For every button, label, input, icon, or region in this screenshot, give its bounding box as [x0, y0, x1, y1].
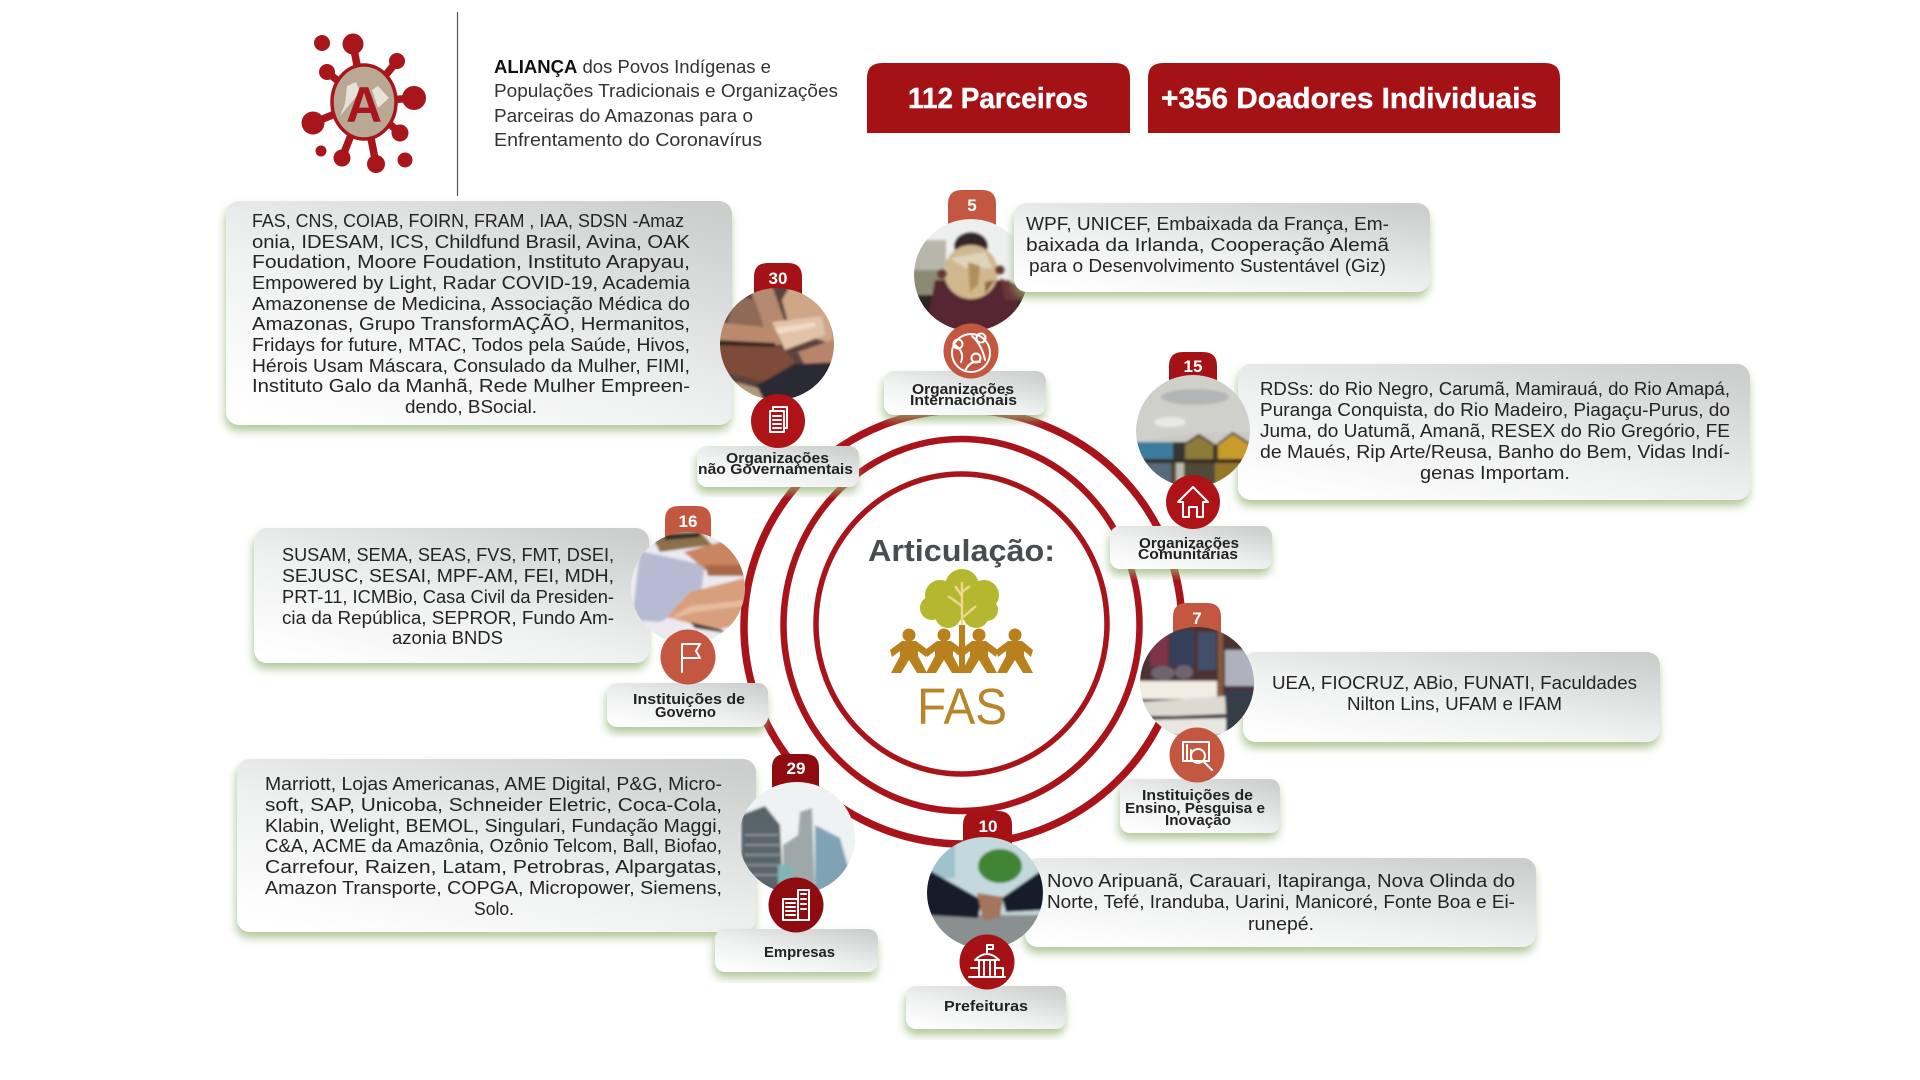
panel: empresas list: soft, SAP, Unicoba, Schneider Eletric, Coca-Cola,	[265, 794, 722, 815]
icon: globe with pins	[944, 324, 998, 378]
icon: house	[1166, 475, 1220, 529]
panel: governo list: PRT-11, ICMBio, Casa Civil da Presiden-	[282, 586, 614, 607]
panel: organizações internacionais list: WPF, UNICEF, Embaixada da França, Em-	[1026, 213, 1389, 234]
header text: alliance name: Enfrentamento do Coronavírus	[494, 129, 762, 150]
FAS logo: tree and people	[890, 569, 1033, 735]
count tab 15: 15	[1184, 357, 1202, 376]
photo: books and glasses	[1140, 627, 1254, 736]
panel: prefeituras list: Novo Aripuanã, Carauari, Itapiranga, Nova Olinda do	[1047, 870, 1515, 891]
panel: organizações internacionais list: baixada da Irlanda, Cooperação Alemã	[1026, 234, 1390, 255]
label box: Ensino, Pesquisa e	[1125, 801, 1265, 817]
badge: 112 parceiros	[867, 63, 1130, 133]
header text: alliance name	[494, 56, 838, 150]
panel: organizações não governamentais list: Foudation, Moore Foudation, Instituto Arapyau,	[252, 251, 690, 272]
panel: organizações não governamentais list: Instituto Galo da Manhã, Rede Mulher Empreen-	[252, 375, 690, 396]
label box: Instituições de	[633, 692, 745, 708]
node: organizações comunitárias	[1110, 352, 1272, 569]
logo: virus emblem	[302, 34, 426, 173]
label box: Inovação	[1165, 813, 1231, 829]
count tab 7	[1173, 603, 1221, 635]
photo: hands with paper	[631, 532, 745, 640]
label box	[1110, 526, 1272, 569]
label box: Empresas	[764, 945, 835, 961]
logo: virus emblem: A	[346, 77, 382, 133]
panel: comunitárias list: de Maués, Rip Arte/Reusa, Banho do Bem, Vidas Indí-	[1260, 441, 1730, 462]
panel: empresas list: Marriott, Lojas Americanas, AME Digital, P&G, Micro-	[265, 773, 722, 794]
label box	[607, 683, 768, 727]
count tab 7: 7	[1192, 609, 1202, 628]
panel: comunitárias list: Juma, do Uatumã, Amanã, RESEX do Rio Gregório, FE	[1260, 420, 1730, 441]
panel: organizações não governamentais list: FAS, CNS, COIAB, FOIRN, FRAM , IAA, SDSN -Amaz	[252, 210, 684, 231]
badge: 112 parceiros: 112 Parceiros	[908, 83, 1088, 115]
label box: Organizações	[726, 451, 829, 467]
panel: organizações não governamentais list: Empowered by Light, Radar COVID-19, Academia	[252, 272, 691, 293]
panel: comunitárias list: RDSs: do Rio Negro, Carumã, Mamirauá, do Rio Amapá,	[1260, 378, 1730, 399]
label box	[1120, 779, 1280, 833]
panel: comunitárias list	[1238, 364, 1750, 500]
center heading: Articulação:	[868, 533, 1055, 568]
node: organizações internacionais	[884, 190, 1046, 415]
icon: town hall	[960, 934, 1014, 990]
icon: documents	[751, 394, 805, 448]
panel: empresas list: Solo.	[474, 898, 514, 919]
label box	[715, 929, 878, 972]
panel: governo list	[254, 528, 649, 663]
count tab 16: 16	[679, 512, 697, 531]
panel: empresas list: Klabin, Welight, BEMOL, Singulari, Fundação Maggi,	[265, 815, 722, 836]
panel: comunitárias list: Puranga Conquista, do Rio Madeiro, Piagaçu-Purus, do	[1260, 399, 1730, 420]
label box	[906, 986, 1066, 1029]
panel: governo list: azonia BNDS	[392, 627, 503, 648]
label box: Internacionais	[910, 393, 1017, 409]
icon: buildings	[768, 878, 824, 932]
icon: flag	[660, 630, 716, 684]
count tab 10: 10	[979, 817, 997, 836]
panel: organizações internacionais list	[1014, 203, 1430, 292]
panel: prefeituras list	[1025, 858, 1536, 947]
count tab 16	[665, 506, 711, 540]
label box: Prefeituras	[944, 999, 1028, 1015]
count tab 29: 29	[787, 759, 805, 778]
FAS logo: tree and people: FAS	[917, 678, 1007, 735]
node: organizações não governamentais	[697, 263, 859, 487]
panel: empresas list: C&A, ACME da Amazônia, Ozônio Telcom, Ball, Biofao,	[265, 835, 722, 856]
photo: handshake	[927, 837, 1043, 946]
count tab 5	[948, 190, 996, 225]
panel: governo list: cia da República, SEPROR, Fundo Am-	[282, 607, 614, 628]
count tab 10	[963, 811, 1012, 845]
panel: organizações não governamentais list: Amazonas, Grupo TransformAÇÃO, Hermanitos,	[252, 313, 690, 334]
panel: empresas list: Amazon Transporte, COPGA, Micropower, Siemens,	[265, 877, 722, 898]
icon: magnifier over chart	[1170, 728, 1224, 782]
header vertical divider	[456, 12, 458, 196]
count tab 29	[772, 754, 819, 790]
panel: organizações não governamentais list: Fridays for future, MTAC, Todos pela Saúde, Hivos,	[252, 334, 690, 355]
node: instituições de governo	[607, 506, 768, 727]
concentric rings	[744, 410, 1182, 844]
panel: empresas list	[237, 759, 756, 932]
panel: organizações não governamentais list: onia, IDESAM, ICS, Childfund Brasil, Avina, OAK	[252, 231, 691, 252]
count tab 30: 30	[769, 269, 787, 288]
count tab 5: 5	[967, 196, 977, 215]
label box: Comunitárias	[1138, 547, 1238, 563]
photo: stacked hands	[720, 288, 834, 398]
photo: child holding globe	[914, 219, 1026, 329]
label box	[697, 446, 859, 487]
badge: doadores individuais: +356 Doadores Individuais	[1161, 83, 1537, 115]
panel: prefeituras list: runepé.	[1248, 913, 1314, 934]
panel: organizações internacionais list: para o Desenvolvimento Sustentável (Giz)	[1029, 255, 1386, 276]
panel: organizações não governamentais list: Hérois Usam Máscara, Consulado da Mulher, FIMI,	[252, 355, 690, 376]
node: prefeituras	[906, 811, 1066, 1029]
label box: Organizações	[912, 382, 1014, 398]
label box: Governo	[655, 705, 716, 721]
node: instituições de ensino	[1120, 603, 1280, 833]
label box: não Governamentais	[698, 462, 853, 478]
panel: empresas list: Carrefour, Raizen, Latam, Petrobras, Alpargatas,	[265, 856, 722, 877]
count tab 15	[1169, 352, 1217, 385]
panel: organizações não governamentais list	[226, 201, 732, 425]
label box	[884, 371, 1046, 415]
panel: ensino list: Nilton Lins, UFAM e IFAM	[1347, 693, 1562, 714]
panel: organizações não governamentais list: Amazonense de Medicina, Associação Médica do	[252, 293, 690, 314]
header text: alliance name: Parceiras do Amazonas para o	[494, 105, 753, 126]
panel: ensino list	[1243, 652, 1660, 742]
header text: alliance name: Populações Tradicionais e Organizações	[494, 80, 838, 101]
label box: Organizações	[1139, 536, 1239, 552]
panel: ensino list: UEA, FIOCRUZ, ABio, FUNATI, Faculdades	[1272, 672, 1637, 693]
panel: governo list: SEJUSC, SESAI, MPF-AM, FEI, MDH,	[282, 565, 614, 586]
photo: stilt houses	[1136, 375, 1250, 484]
photo: skyscrapers	[738, 780, 858, 895]
node: empresas	[715, 754, 878, 972]
label box: Instituições de	[1142, 788, 1253, 804]
count tab 30	[754, 263, 802, 295]
panel: comunitárias list: genas Importam.	[1420, 462, 1570, 483]
panel: prefeituras list: Norte, Tefé, Iranduba, Uarini, Manicoré, Fonte Boa e Ei-	[1047, 891, 1515, 912]
header text: alliance name: ALIANÇA dos Povos Indígenas e	[494, 56, 771, 77]
badge: doadores individuais	[1148, 63, 1560, 133]
panel: governo list: SUSAM, SEMA, SEAS, FVS, FMT, DSEI,	[282, 544, 614, 565]
panel: organizações não governamentais list: dendo, BSocial.	[405, 396, 537, 417]
